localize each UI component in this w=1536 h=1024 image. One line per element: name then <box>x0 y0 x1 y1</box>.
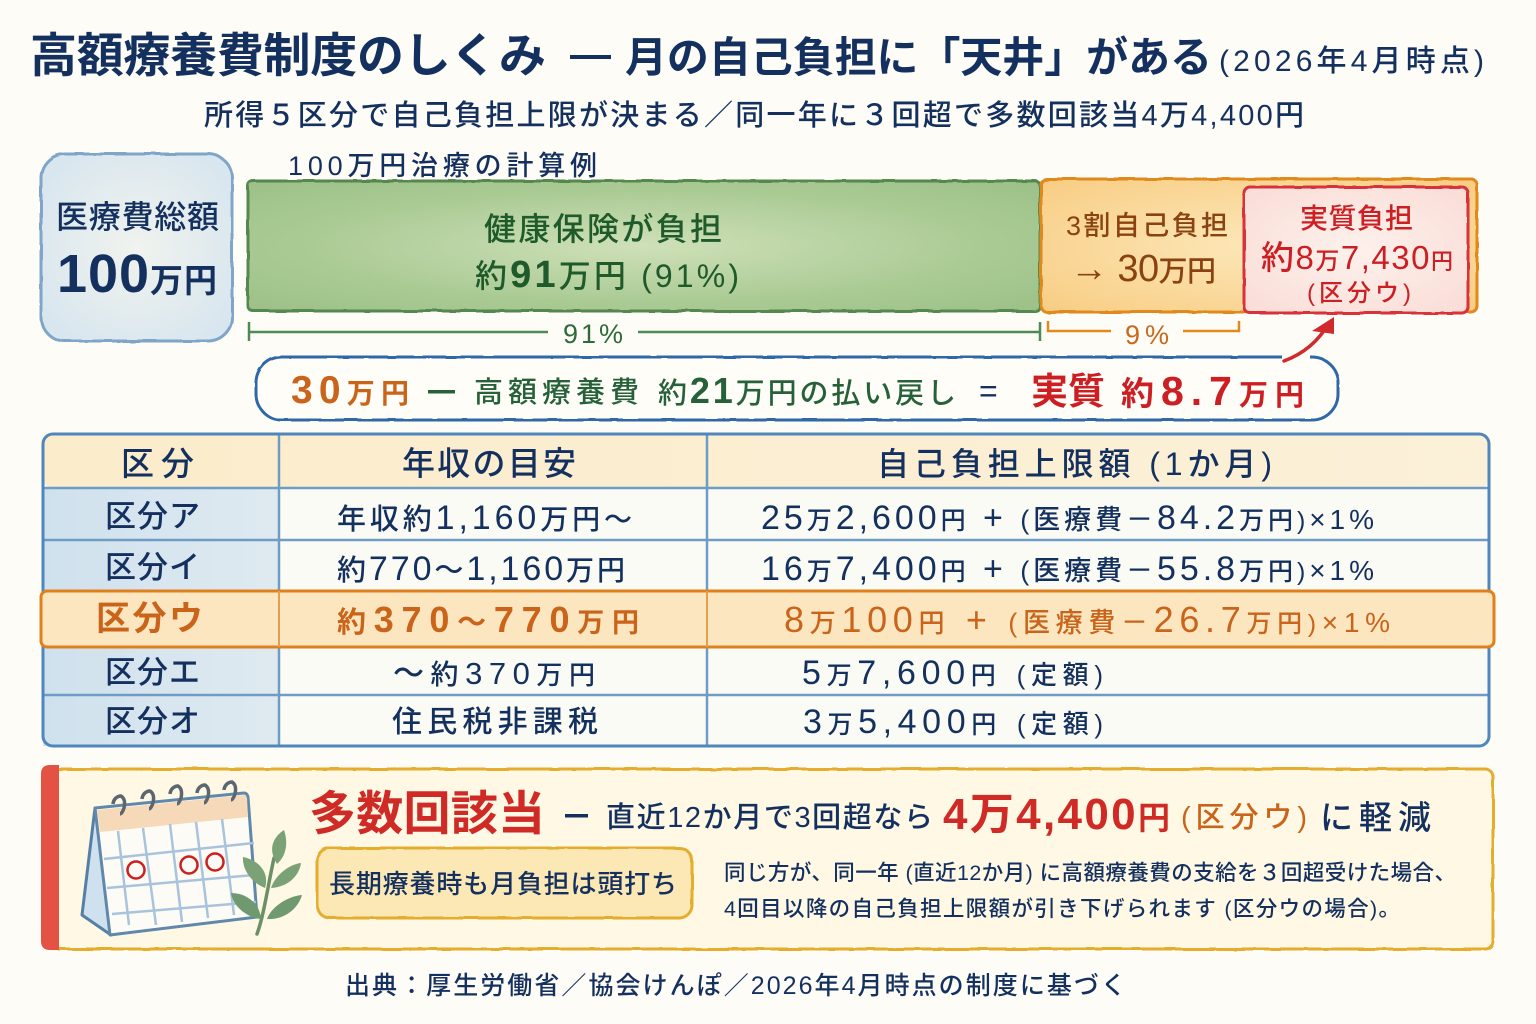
title: (2026年4月時点) <box>1219 45 1484 78</box>
table header: 自己負担上限額 (1か月) <box>877 446 1272 482</box>
row: 区分イ: 区分イ <box>105 550 200 585</box>
callout: calculation formula: 30万円 <box>291 369 409 412</box>
callout: calculation formula: 約21万円の払い戻し <box>658 370 956 411</box>
title <box>30 29 1484 82</box>
callout: calculation formula: 実質 <box>1031 371 1105 412</box>
row: 区分オ: 住民税非課税 <box>392 706 598 739</box>
callout: calculation formula <box>256 352 1338 420</box>
text: reduction statement: 直近12か月で3回超なら <box>606 801 933 834</box>
bar: 30% copayment: → 30万円 <box>1070 248 1216 290</box>
row: 区分エ: ～約370 万円 <box>393 656 595 691</box>
table header <box>43 434 1489 488</box>
panel: total medical cost <box>41 154 232 341</box>
row: 区分ア: 25万2,600円 + (医療費－84.2万円)×1% <box>761 499 1374 537</box>
panel: multiple-times reduction <box>41 765 1493 950</box>
panel: total medical cost: 医療費総額 <box>56 199 219 235</box>
bar: health insurance share: 約91万円 (91%) <box>475 254 739 296</box>
bracket: 91% <box>249 319 1040 349</box>
row: 区分ア <box>105 499 1374 537</box>
bracket: 9%: 9% <box>1125 320 1169 350</box>
text: reduction statement: に軽減 <box>1320 799 1431 836</box>
table header: 年収の目安 <box>402 445 576 482</box>
box: effective burden: 約8万7,430円 <box>1261 239 1453 276</box>
bracket: 9% <box>1048 320 1239 350</box>
bar: 30% copayment: 3割自己負担 <box>1066 211 1228 241</box>
table grid <box>43 434 1489 746</box>
row: 区分イ <box>105 550 1374 588</box>
callout: calculation formula: 約8.7万円 <box>1121 368 1304 414</box>
title: 月の自己負担に「天井」がある <box>625 34 1212 81</box>
table header: 区分 <box>121 445 194 482</box>
row: 区分エ: 5万7,600円 (定額) <box>802 654 1103 692</box>
highlighted row: 区分ウ: 区分ウ <box>96 600 203 638</box>
highlighted row: 区分ウ: 約370 ～770 万円 <box>337 599 639 640</box>
text: reduction statement: (区分ウ) <box>1181 802 1307 834</box>
text: reduction statement: 4万4,400円 <box>943 790 1170 839</box>
callout: calculation formula: = <box>979 373 998 409</box>
subtitle: 所得５区分で自己負担上限が決まる／同一年に３回超で多数回該当4万4,400円 <box>204 99 1304 132</box>
heading: 多数回該当: 多数回該当 <box>309 787 545 840</box>
red side stripe <box>41 765 59 950</box>
text: explanation <box>724 861 1456 921</box>
source: 出典：厚生労働省／協会けんぽ／2026年4月時点の制度に基づく <box>345 972 1126 1000</box>
row: 区分オ: 区分オ <box>105 704 200 739</box>
arrow: to effective burden <box>1284 317 1334 361</box>
row: 区分ア: 年収約1,160万円～ <box>337 499 632 537</box>
text: explanation: 4回目以降の自己負担上限額が引き下げられます (区分ウの場合)。 <box>724 897 1400 921</box>
bracket: 91%: 91% <box>563 319 623 349</box>
text: reduction statement <box>606 790 1431 839</box>
callout: calculation formula: 高額療養費 <box>474 376 639 409</box>
row backgrounds <box>43 488 1489 746</box>
text: explanation: 同じ方が、同一年 (直近12か月) に高額療養費の支給を３回超受けた場合、 <box>724 861 1456 885</box>
row: 区分エ <box>105 654 1103 692</box>
row: 区分オ <box>105 703 1103 741</box>
highlighted row: 区分ウ <box>41 591 1494 647</box>
row: 区分イ: 約770～1,160万円 <box>337 550 625 588</box>
box: effective burden: (区分ウ) <box>1307 280 1411 307</box>
row: 区分オ: 3万5,400円 (定額) <box>803 703 1103 741</box>
highlighted row: 区分ウ: 8万100円 + (医療費－26.7万円)×1% <box>784 599 1390 640</box>
row: 区分ア: 区分ア <box>105 499 200 534</box>
bar: 30% copayment <box>1041 179 1477 312</box>
caption: calculation example: 100万円治療の計算例 <box>288 151 597 181</box>
box: effective burden: 実質負担 <box>1300 203 1413 234</box>
bar: health insurance share: 健康保険が負担 <box>484 211 722 247</box>
row: 区分イ: 16万7,400円 + (医療費－55.8万円)×1% <box>761 550 1374 588</box>
badge: monthly cap during long-term care <box>317 848 692 918</box>
box: effective burden <box>1244 187 1468 313</box>
bar: health insurance share <box>248 181 1040 311</box>
panel: total medical cost: 100万円 <box>57 244 217 304</box>
title: 高額療養費制度のしくみ <box>30 29 546 82</box>
table: income categories <box>41 434 1494 746</box>
icon: desk calendar with leaf <box>82 782 302 935</box>
badge: monthly cap during long-term care: 長期療養時も月負担は頭打ち <box>329 869 677 899</box>
row: 区分エ: 区分エ <box>105 655 200 690</box>
